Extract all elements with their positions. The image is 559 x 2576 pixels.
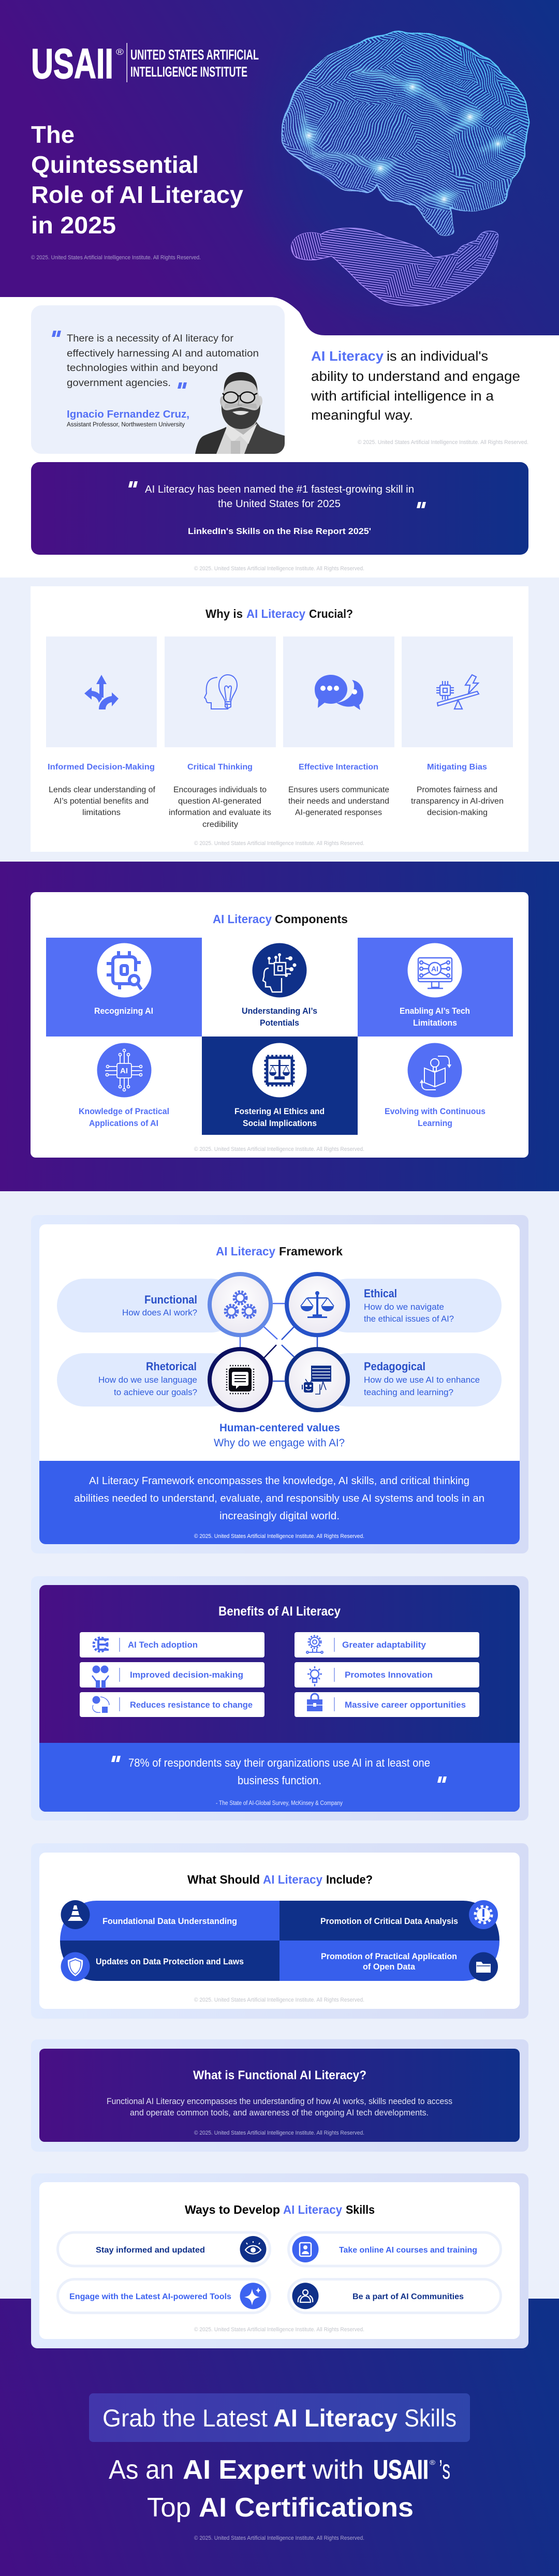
framework description bbox=[39, 1461, 520, 1544]
heading: What Should bbox=[187, 1873, 260, 1886]
logo: USAII bbox=[31, 40, 113, 87]
pills bbox=[58, 2232, 501, 2313]
heading: Why is bbox=[205, 607, 243, 620]
quote text: There is a necessity of AI literacy for bbox=[67, 333, 234, 344]
framework description: © 2025. United States Artificial Intelligence Institute. All Rights Reserved. bbox=[194, 1533, 364, 1539]
quadrant shape bbox=[60, 1901, 499, 1981]
headline: AI expert: AI Expert bbox=[183, 2455, 306, 2485]
quadrant labels: Updates on Data Protection and Laws bbox=[96, 1957, 244, 1966]
cell labels: Limitations bbox=[413, 1018, 457, 1028]
heading: Crucial? bbox=[309, 607, 353, 620]
column descriptions bbox=[49, 786, 504, 829]
column descriptions: Encourages individuals to bbox=[173, 786, 267, 794]
icon: ethical scales bbox=[287, 1274, 348, 1335]
quote text bbox=[67, 333, 259, 389]
closing quote mark bbox=[178, 382, 187, 389]
cell labels: Potentials bbox=[260, 1018, 299, 1028]
label: pedagogical: teaching and learning? bbox=[364, 1387, 453, 1397]
label: rhetorical: How do we use language bbox=[98, 1375, 197, 1385]
attribution: Ignacio Fernandez Cruz, bbox=[67, 409, 189, 420]
benefit labels: AI Tech adoption bbox=[128, 1640, 198, 1650]
icon: continuous learning bbox=[408, 1043, 462, 1097]
icon: tech adoption bbox=[94, 1638, 109, 1651]
quote text: technologies within and beyond bbox=[67, 363, 218, 374]
copyright: © 2025. United States Artificial Intelligence Institute. All Rights Reserved. bbox=[194, 2327, 364, 2333]
icon: rhetorical chip bbox=[210, 1349, 271, 1410]
icon: career briefcase bbox=[307, 1694, 322, 1711]
cell labels bbox=[79, 1006, 486, 1128]
copyright: © 2025. United States Artificial Intelligence Institute. All Rights Reserved. bbox=[194, 840, 364, 847]
heading: Include? bbox=[326, 1873, 373, 1886]
cell labels: Learning bbox=[418, 1119, 452, 1128]
title: Role of AI Literacy bbox=[31, 181, 243, 208]
label: rhetorical: to achieve our goals? bbox=[114, 1387, 197, 1397]
benefit cards bbox=[80, 1632, 479, 1717]
icon: recognizing AI bbox=[97, 943, 151, 998]
copyright: © 2025. United States Artificial Intelligence Institute. All Rights Reserved. bbox=[194, 1997, 364, 2003]
icon: chat bubbles bbox=[315, 675, 363, 710]
band: components bbox=[0, 862, 559, 1191]
icon: open data folder bbox=[469, 1952, 498, 1981]
definition text: is an individual's bbox=[387, 349, 488, 364]
headline: AI expert: AI Certifications bbox=[199, 2493, 414, 2523]
body text: and operate common tools, and awareness of the ongoing AI tech developments. bbox=[130, 2108, 429, 2118]
label: ethical: Ethical bbox=[364, 1287, 397, 1300]
icon: functional gears bbox=[210, 1274, 271, 1335]
panel: benefits of AI literacy bbox=[31, 1576, 528, 1820]
column descriptions: information and evaluate its bbox=[169, 808, 271, 817]
headline: AI expert: ’s bbox=[439, 2455, 450, 2485]
definition text: with artificial intelligence in a bbox=[311, 389, 494, 404]
heading bbox=[185, 2203, 375, 2216]
band: footer background bbox=[0, 2299, 559, 2576]
heading: AI Literacy bbox=[283, 2203, 342, 2216]
hero banner bbox=[0, 0, 559, 335]
headline: AI expert: ® bbox=[430, 2459, 435, 2466]
logo: ® bbox=[116, 47, 124, 57]
title bbox=[31, 121, 243, 239]
label: rhetorical bbox=[98, 1360, 197, 1397]
label: pedagogical: How do we use AI to enhance bbox=[364, 1375, 480, 1385]
panel: LinkedIn callout bbox=[31, 462, 528, 555]
icon: enabling AI's tech limitations: AI bbox=[431, 965, 438, 973]
icon: resistance to change bbox=[92, 1696, 109, 1713]
label: human-centered values: Human-centered values bbox=[219, 1422, 340, 1434]
brain illustration bbox=[263, 31, 530, 292]
column descriptions: decision-making bbox=[427, 808, 488, 817]
quadrant labels: Foundational Data Understanding bbox=[102, 1916, 237, 1926]
pills bbox=[57, 1279, 502, 1407]
column descriptions: Ensures users communicate bbox=[288, 786, 389, 794]
icon: adaptability bbox=[306, 1636, 323, 1653]
body text: Functional AI Literacy encompasses the understanding of how AI works, skills needed to access bbox=[107, 2097, 452, 2106]
glowing ribbons bbox=[304, 71, 512, 199]
benefit labels: Improved decision-making bbox=[130, 1670, 243, 1680]
icon: decision-making hands bbox=[92, 1665, 109, 1688]
icon: eye bbox=[240, 2236, 266, 2262]
hand illustration bbox=[291, 228, 499, 306]
column descriptions: AI-generated responses bbox=[295, 808, 382, 817]
attribution bbox=[67, 409, 189, 428]
cell labels: Knowledge of Practical bbox=[79, 1107, 169, 1116]
column cards bbox=[46, 636, 513, 747]
definition text bbox=[311, 349, 520, 423]
column headings: Effective Interaction bbox=[299, 763, 378, 772]
button: grab the latest skills: AI Literacy bbox=[273, 2404, 398, 2432]
copyright: © 2025. United States Artificial Intelligence Institute. All Rights Reserved. bbox=[358, 439, 528, 446]
card dividers bbox=[120, 1638, 334, 1711]
icon: practical applications of AI bbox=[97, 1043, 151, 1097]
icon: community bbox=[292, 2283, 319, 2309]
copyright: © 2025. United States Artificial Intelligence Institute. All Rights Reserved. bbox=[194, 2535, 364, 2541]
quote text: government agencies. bbox=[67, 378, 171, 389]
column descriptions: limitations bbox=[82, 808, 121, 817]
copyright: © 2025. United States Artificial Intelligence Institute. All Rights Reserved. bbox=[194, 566, 364, 572]
callout: McKinsey statistic bbox=[39, 1743, 520, 1812]
grid cell blocks bbox=[46, 938, 513, 1135]
label: rhetorical: Rhetorical bbox=[146, 1360, 197, 1373]
heading bbox=[205, 607, 353, 620]
cell labels: Fostering AI Ethics and bbox=[234, 1107, 325, 1116]
framework description: AI Literacy Framework encompasses the knowledge, AI skills, and critical thinking bbox=[89, 1475, 469, 1487]
heading: Framework bbox=[279, 1245, 343, 1258]
icon: balance with chip and bolt bbox=[436, 675, 479, 709]
column descriptions: Lends clear understanding of bbox=[49, 786, 156, 794]
framework description: increasingly digital world. bbox=[219, 1510, 340, 1522]
label: ethical: the ethical issues of AI? bbox=[364, 1314, 454, 1324]
logo bbox=[31, 40, 259, 87]
panel: why AI literacy is crucial bbox=[31, 586, 528, 852]
button: grab the latest skills: Skills bbox=[404, 2404, 457, 2432]
attribution: Assistant Professor, Northwestern University bbox=[67, 422, 185, 428]
cell labels: Social Implications bbox=[243, 1119, 317, 1128]
heading: Ways to Develop bbox=[185, 2203, 280, 2216]
cell labels: Applications of AI bbox=[89, 1119, 158, 1128]
heading: AI Literacy bbox=[263, 1873, 322, 1886]
headline: AI expert: with bbox=[312, 2455, 364, 2485]
panel: LinkedIn callout: AI Literacy has been named the #1 fastest-growing skill in bbox=[145, 483, 414, 495]
cell labels: Enabling AI’s Tech bbox=[400, 1006, 470, 1016]
heading: AI Literacy bbox=[216, 1245, 275, 1258]
logo: INTELLIGENCE INSTITUTE bbox=[130, 64, 247, 80]
column descriptions: Promotes fairness and bbox=[417, 786, 497, 794]
icon: practical applications of AI: AI bbox=[120, 1067, 128, 1075]
panel: ways to develop AI literacy skills bbox=[31, 2173, 528, 2348]
callout: McKinsey statistic: business function. bbox=[238, 1774, 321, 1787]
portrait photo bbox=[195, 372, 285, 454]
icon: understanding AI's potentials bbox=[253, 943, 306, 998]
panel: AI literacy components bbox=[31, 892, 528, 1158]
heading bbox=[216, 1245, 343, 1258]
label: ethical: How do we navigate bbox=[364, 1302, 444, 1312]
benefit labels: Greater adaptability bbox=[342, 1640, 426, 1650]
benefit labels: Reduces resistance to change bbox=[130, 1700, 253, 1710]
column descriptions: transparency in AI-driven bbox=[411, 797, 504, 806]
headline: AI expert: USAII bbox=[373, 2455, 429, 2485]
quadrant labels: of Open Data bbox=[363, 1962, 416, 1972]
label: functional bbox=[122, 1293, 197, 1317]
headline: AI expert: As an bbox=[109, 2455, 174, 2485]
panel: what should AI literacy include bbox=[31, 1843, 528, 2019]
callout: McKinsey statistic: - The State of AI-Global Survey, McKinsey & Company bbox=[216, 1800, 343, 1807]
callout: McKinsey statistic: 78% of respondents say their organizations use AI in at least one bbox=[128, 1756, 430, 1769]
icon: head with light bulb bbox=[204, 675, 237, 709]
panel: what is functional AI literacy bbox=[31, 2039, 528, 2152]
label: functional: Functional bbox=[144, 1293, 197, 1306]
label: ethical bbox=[364, 1287, 454, 1324]
icon: AI sparkle bbox=[240, 2283, 266, 2309]
call to action bbox=[89, 2393, 470, 2541]
body text bbox=[107, 2097, 452, 2118]
column descriptions: AI’s potential benefits and bbox=[54, 797, 149, 806]
quadrant labels: Promotion of Practical Application bbox=[321, 1951, 457, 1961]
pill labels: Stay informed and updated bbox=[96, 2246, 205, 2255]
cell labels: Evolving with Continuous bbox=[385, 1107, 486, 1116]
quadrant labels bbox=[96, 1916, 458, 1972]
heading: AI Literacy bbox=[213, 912, 272, 926]
panel: LinkedIn callout: the United States for 2025 bbox=[218, 498, 341, 510]
icon: shield bbox=[61, 1952, 90, 1981]
title: Quintessential bbox=[31, 151, 199, 178]
quote text: effectively harnessing AI and automation bbox=[67, 348, 259, 359]
column headings: Critical Thinking bbox=[187, 763, 253, 772]
pill labels: Engage with the Latest AI-powered Tools bbox=[69, 2292, 231, 2301]
label: pedagogical: Pedagogical bbox=[364, 1360, 425, 1373]
label: pedagogical bbox=[364, 1360, 480, 1397]
definition text: AI Literacy bbox=[311, 349, 384, 364]
icon: pedagogical board bbox=[287, 1349, 348, 1410]
column descriptions: their needs and understand bbox=[288, 797, 389, 806]
label: human-centered values: Why do we engage with AI? bbox=[214, 1437, 345, 1449]
headline: AI expert bbox=[109, 2455, 450, 2523]
quadrant labels: Promotion of Critical Data Analysis bbox=[320, 1916, 458, 1926]
opening quote mark bbox=[52, 331, 61, 337]
heading: What is Functional AI Literacy? bbox=[193, 2068, 366, 2082]
heading: AI Literacy bbox=[246, 607, 305, 620]
label: human-centered values bbox=[214, 1422, 345, 1449]
heading: Components bbox=[275, 912, 348, 926]
title: The bbox=[31, 121, 75, 148]
column descriptions: credibility bbox=[202, 820, 238, 829]
title: in 2025 bbox=[31, 212, 116, 239]
heading: Skills bbox=[346, 2203, 375, 2216]
button: grab the latest skills: Grab the Latest bbox=[102, 2404, 268, 2432]
connectors bbox=[240, 1304, 317, 1381]
framework description: abilities needed to understand, evaluate, and responsibly use AI systems and tools in an bbox=[74, 1492, 484, 1504]
cell labels: Recognizing AI bbox=[94, 1006, 153, 1016]
copyright: © 2025. United States Artificial Intelligence Institute. All Rights Reserved. bbox=[194, 1146, 364, 1152]
quote marks bbox=[128, 481, 138, 487]
column descriptions: question AI-generated bbox=[178, 797, 261, 806]
heading bbox=[213, 912, 348, 926]
column headings bbox=[48, 763, 487, 772]
hero copyright: © 2025. United States Artificial Intelligence Institute. All Rights Reserved. bbox=[31, 255, 201, 261]
panel: AI literacy framework bbox=[31, 1215, 528, 1553]
heading: Benefits of AI Literacy bbox=[218, 1604, 341, 1619]
panel: expert quote bbox=[31, 305, 285, 454]
definition text: meaningful way. bbox=[311, 408, 413, 423]
icon: AI ethics bbox=[253, 1043, 306, 1097]
heading bbox=[187, 1873, 373, 1886]
icon: innovation bulb bbox=[307, 1666, 322, 1686]
benefit labels bbox=[128, 1640, 466, 1710]
cell labels: Understanding AI’s bbox=[242, 1006, 317, 1016]
panel: LinkedIn callout: LinkedIn's Skills on the Rise Report 2025' bbox=[188, 527, 371, 536]
pill labels bbox=[69, 2246, 477, 2301]
pill labels: Be a part of AI Communities bbox=[352, 2292, 464, 2301]
pill labels: Take online AI courses and training bbox=[339, 2246, 477, 2255]
copyright: © 2025. United States Artificial Intelligence Institute. All Rights Reserved. bbox=[194, 2130, 364, 2136]
icon: foundation cone bbox=[61, 1900, 90, 1929]
column headings: Mitigating Bias bbox=[427, 763, 487, 772]
headline: AI expert: Top bbox=[147, 2493, 191, 2523]
benefit labels: Massive career opportunities bbox=[345, 1700, 466, 1710]
icon: online course screen bbox=[292, 2236, 319, 2262]
benefit labels: Promotes Innovation bbox=[345, 1670, 433, 1680]
icon: diverging arrows bbox=[84, 675, 119, 709]
label: functional: How does AI work? bbox=[122, 1308, 197, 1317]
icon: critical analysis badge bbox=[469, 1900, 498, 1929]
column headings: Informed Decision-Making bbox=[48, 763, 155, 772]
button: grab the latest skills bbox=[89, 2393, 470, 2442]
logo: UNITED STATES ARTIFICIAL bbox=[130, 47, 259, 63]
icon: enabling AI's tech limitations bbox=[408, 943, 462, 998]
definition text: ability to understand and engage bbox=[311, 369, 520, 384]
